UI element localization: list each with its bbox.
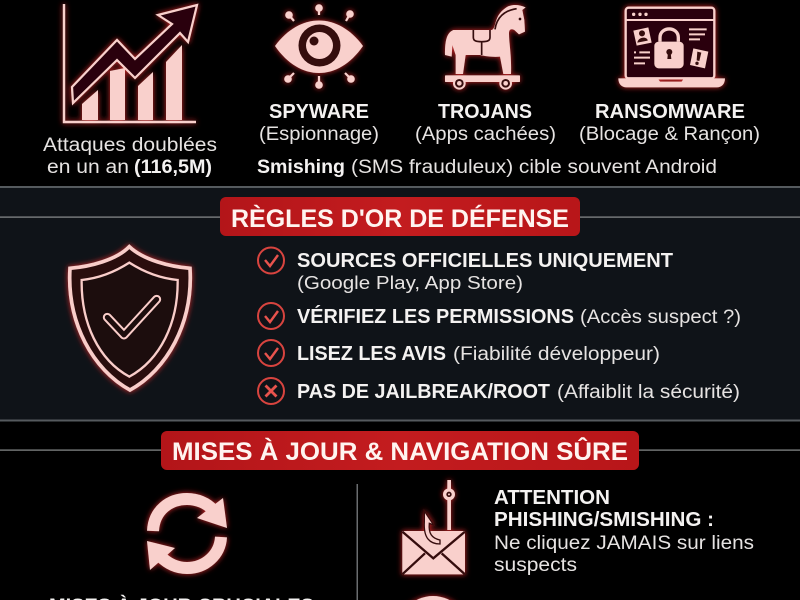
text: attacks doubled: en un an bbox=[47, 157, 129, 178]
rule: no jailbreak: PAS DE JAILBREAK/ROOT bbox=[297, 381, 550, 403]
text: phishing warning: PHISHING/SMISHING : bbox=[494, 509, 714, 531]
icon: refresh arrows bbox=[147, 498, 227, 570]
rule: read reviews: LISEZ LES AVIS bbox=[297, 343, 446, 365]
rule: official sources: SOURCES OFFICIELLES UNIQUEMENT bbox=[297, 250, 673, 272]
heading: golden rules bbox=[220, 197, 580, 236]
text: smishing note: Smishing bbox=[257, 157, 345, 178]
icon: shield bbox=[70, 247, 190, 390]
text: phishing warning: ATTENTION bbox=[494, 487, 610, 509]
panel: threats bbox=[43, 4, 760, 178]
labels: ransomware: RANSOMWARE bbox=[595, 101, 745, 123]
rule: official sources: (Google Play, App Store) bbox=[297, 272, 523, 293]
labels: spyware: (Espionnage) bbox=[259, 124, 379, 145]
labels: trojans: (Apps cachées) bbox=[415, 124, 556, 145]
text: smishing note: (SMS frauduleux) cible souvent Android bbox=[351, 157, 717, 178]
icon: phishing envelope bbox=[402, 480, 465, 574]
panel: updates and safe browsing bbox=[0, 431, 800, 600]
labels: spyware: SPYWARE bbox=[269, 101, 369, 123]
rule: no jailbreak: (Affaiblit la sécurité) bbox=[557, 382, 740, 403]
labels: trojans: TROJANS bbox=[438, 101, 532, 123]
rule: read reviews: (Fiabilité développeur) bbox=[453, 344, 660, 365]
rule: check permissions bbox=[258, 303, 741, 329]
heading: updates and navigation bbox=[161, 431, 639, 470]
icon: spyware eye bbox=[275, 4, 363, 89]
text: attacks doubled: Attaques doublées bbox=[43, 135, 217, 156]
text: phishing warning bbox=[494, 487, 754, 576]
icon: rising attacks chart bbox=[64, 4, 197, 122]
text: attacks doubled bbox=[43, 135, 217, 178]
rule: read reviews bbox=[258, 340, 660, 366]
labels: ransomware: (Blocage & Rançon) bbox=[579, 124, 760, 145]
heading: golden rules: RÈGLES D'OR DE DÉFENSE bbox=[231, 204, 569, 233]
labels: spyware bbox=[259, 101, 379, 145]
text: phishing warning: Ne cliquez JAMAIS sur liens bbox=[494, 533, 754, 554]
rule: check permissions: (Accès suspect ?) bbox=[580, 307, 741, 328]
rule: official sources bbox=[258, 248, 673, 293]
text: phishing warning: suspects bbox=[494, 555, 577, 576]
heading: updates and navigation: MISES À JOUR & NAVIGATION SÛRE bbox=[172, 436, 628, 466]
icon: ransomware laptop bbox=[618, 8, 725, 87]
rule: no jailbreak bbox=[258, 378, 740, 404]
icon: trojan horse bbox=[445, 5, 526, 90]
labels: trojans bbox=[415, 101, 556, 145]
icon: next item cropped circle bbox=[397, 596, 469, 600]
text: attacks doubled: (116,5M) bbox=[134, 157, 212, 178]
rule: check permissions: VÉRIFIEZ LES PERMISSIONS bbox=[297, 305, 574, 328]
labels: ransomware bbox=[579, 101, 760, 145]
panel: defence rules bbox=[0, 186, 800, 422]
